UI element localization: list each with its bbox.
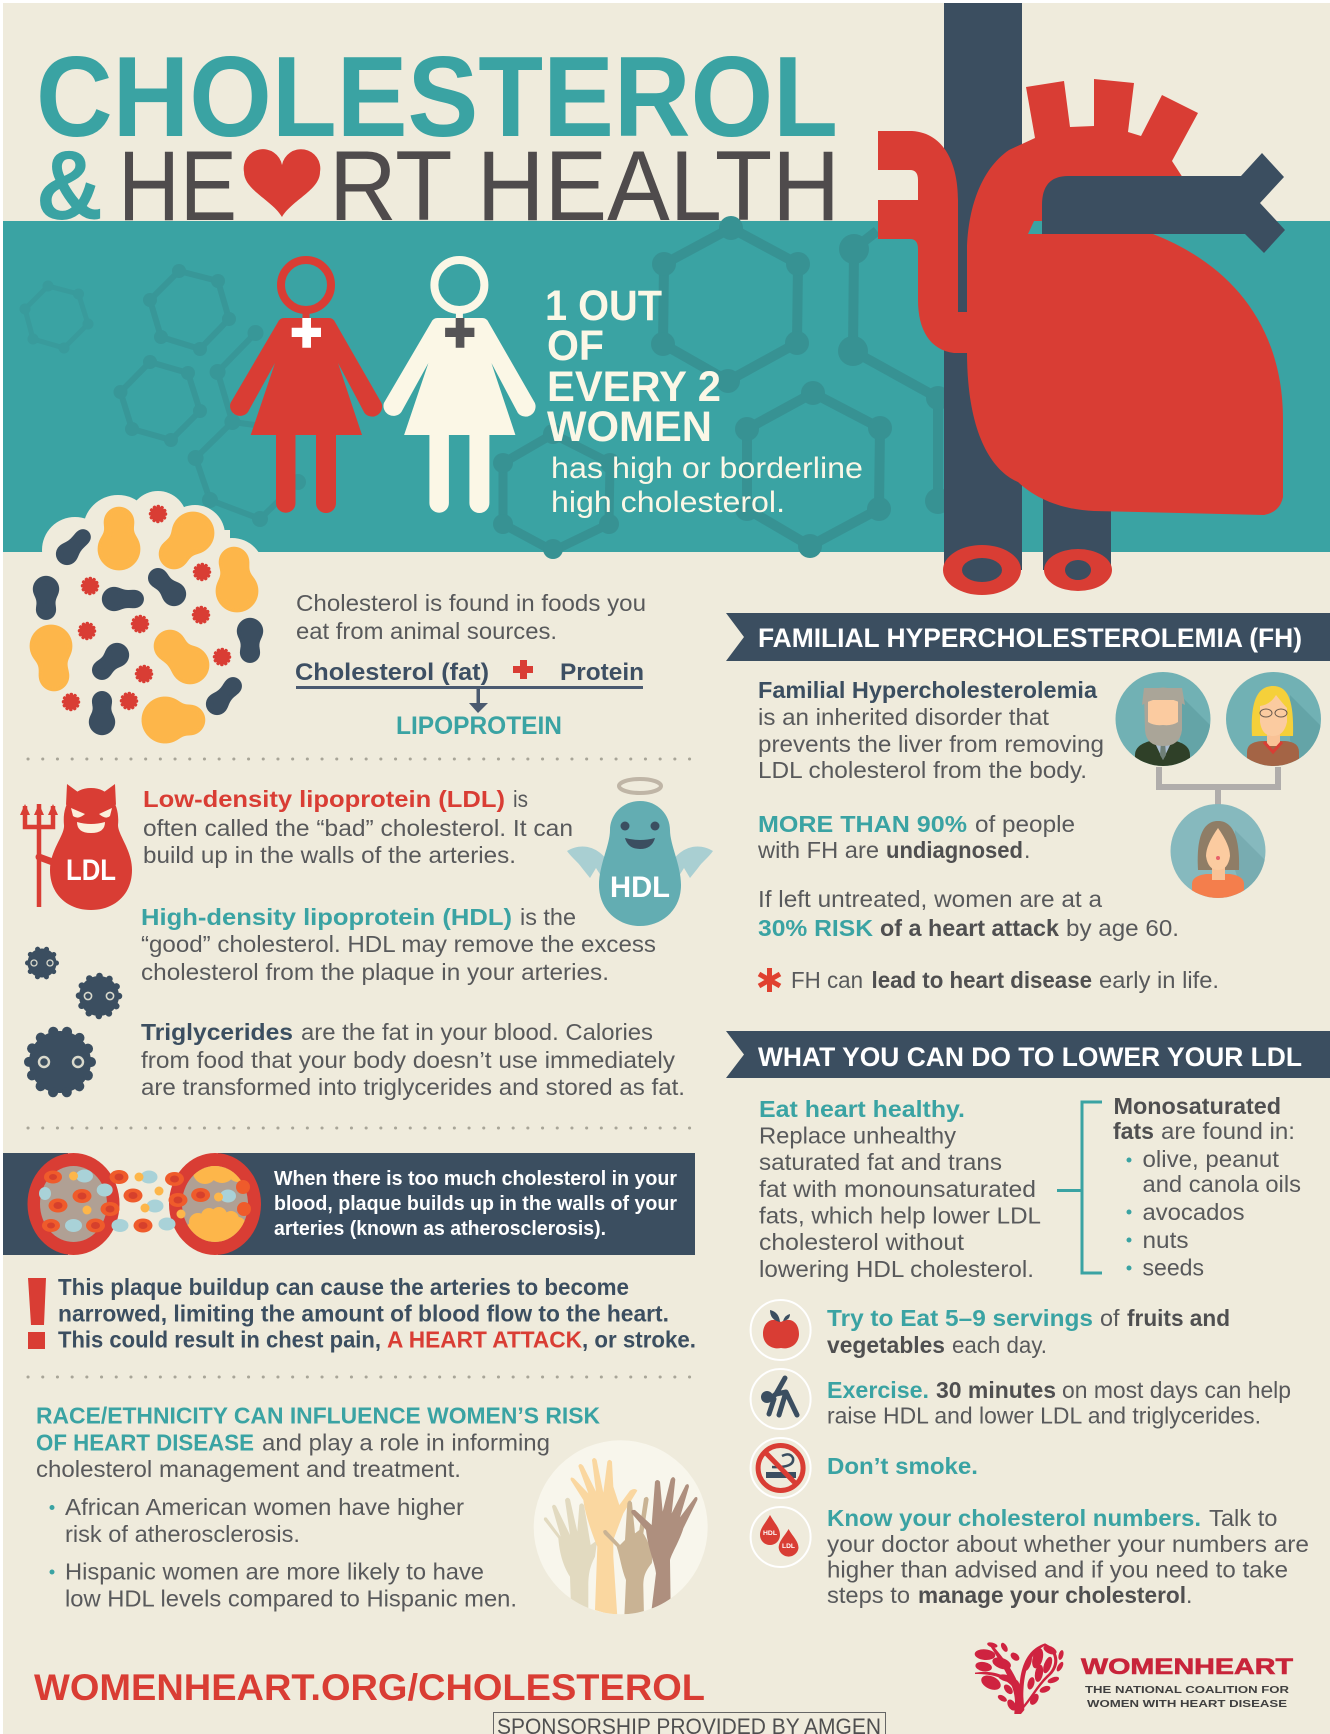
portrait: woman: [1226, 672, 1325, 770]
equation: lipoprotein: LIPOPROTEIN: [396, 712, 562, 740]
callout text: [274, 1168, 677, 1240]
trident: [25, 804, 53, 907]
second vein: [1043, 400, 1111, 570]
text: undiagnosed stat: .: [1024, 837, 1030, 863]
list: race bullets: [50, 1494, 517, 1612]
red particles: [64, 506, 230, 710]
list: monosaturated fats: fats: [1113, 1118, 1154, 1144]
text: risk stat: by age 60.: [1066, 915, 1179, 941]
text: know your numbers: .: [1186, 1582, 1192, 1608]
teal banner band: [3, 216, 1330, 559]
list: monosaturated fats: Monosaturated: [1114, 1093, 1281, 1119]
peach hand: [571, 1458, 637, 1617]
text: risk stat: [758, 886, 1179, 941]
banner: lower LDL heading: [726, 1031, 1330, 1078]
illustration: arteries: [28, 1153, 261, 1255]
title line two start: HE: [118, 130, 237, 241]
arrow down: [469, 688, 488, 713]
gap teal: [1028, 221, 1042, 234]
text: FH description: [758, 677, 1104, 783]
text: plaque warning: narrowed, limiting the amount of blood flow to the heart.: [58, 1300, 669, 1326]
text: exercise: [827, 1377, 1291, 1428]
text: triglycerides: are the fat in your blood. Calories: [301, 1019, 653, 1045]
text: know your numbers: your doctor about whether your numbers are: [827, 1531, 1309, 1557]
list: monosaturated fats: and canola oils: [1142, 1171, 1301, 1197]
text: race and ethnicity: cholesterol management and treatment.: [36, 1456, 461, 1482]
text: don't smoke: Don’t smoke.: [827, 1453, 978, 1479]
artery arrow: [1042, 153, 1285, 253]
stat: 1 out of every 2 women: WOMEN: [547, 403, 712, 451]
icon: blood drops: [751, 1507, 811, 1567]
molecule hexagon pattern: [20, 216, 951, 559]
text: fruits and vegetables: vegetables: [827, 1332, 945, 1358]
stat: 1 out of every 2 women: [545, 282, 863, 519]
text: risk stat: If left untreated, women are at a: [758, 886, 1102, 912]
equation: lipoprotein: Protein: [560, 659, 644, 686]
list: race bullets: Hispanic women are more likely to have: [65, 1558, 484, 1584]
text: exercise: on most days can help: [1062, 1377, 1291, 1403]
text: HDL: cholesterol from the plaque in your arteries.: [141, 959, 609, 985]
text: eat heart healthy: fats, which help lower LDL: [759, 1202, 1041, 1228]
text: FH description: LDL cholesterol from the body.: [758, 757, 1087, 783]
banner: lower LDL heading: WHAT YOU CAN DO TO LOWER YOUR LDL: [758, 1042, 1302, 1072]
text: FH description: Familial Hypercholesterolemia: [758, 677, 1097, 703]
illustration: raised hands: [534, 1440, 708, 1617]
text: FH description: is an inherited disorder that: [758, 704, 1050, 730]
stat: 1 out of every 2 women: high cholesterol.: [551, 486, 785, 519]
wings: [567, 846, 713, 884]
portrait: daughter: [1170, 804, 1270, 900]
icons: triglyceride germs: [28, 948, 119, 1093]
text: eat heart healthy: lowering HDL cholesterol.: [759, 1256, 1034, 1282]
equation: lipoprotein: Cholesterol (fat): [295, 659, 489, 686]
icon: exercise: [751, 1369, 811, 1429]
text: LDL: [143, 786, 573, 868]
list: monosaturated fats: nuts: [1142, 1227, 1188, 1253]
text: HDL: “good” cholesterol. HDL may remove the excess: [141, 931, 656, 957]
text: eat heart healthy: Eat heart healthy.: [759, 1096, 965, 1122]
icon: HDL angel: [567, 779, 713, 926]
icon: plus: [513, 660, 533, 679]
text: HDL: [141, 904, 656, 985]
text: undiagnosed stat: [757, 811, 1075, 863]
text: fruits and vegetables: of: [1100, 1305, 1120, 1331]
bracket: [1057, 1102, 1102, 1273]
icon: LDL devil: LDL: [66, 854, 116, 887]
text: FH description: prevents the liver from removing: [758, 731, 1104, 757]
stat: 1 out of every 2 women: has high or borderline: [551, 452, 863, 485]
text: triglycerides: [141, 1019, 685, 1100]
text: fruits and vegetables: each day.: [952, 1332, 1047, 1358]
text: eat heart healthy: [759, 1096, 1041, 1282]
icon: woman red: [230, 260, 382, 513]
text: undiagnosed stat: undiagnosed: [886, 837, 1023, 863]
text: know your numbers: steps to: [827, 1582, 910, 1608]
callout text: When there is too much cholesterol in your: [274, 1168, 677, 1190]
list: monosaturated fats: avocados: [1142, 1199, 1244, 1225]
text: found in foods: [296, 590, 646, 644]
logo tagline: [1085, 1684, 1290, 1710]
list: monosaturated fats: are found in:: [1161, 1118, 1295, 1144]
logo tagline: THE NATIONAL COALITION FOR: [1085, 1684, 1290, 1696]
logo wordmark: WOMENHEART: [1081, 1654, 1294, 1679]
text: LDL: Low-density lipoprotein (LDL): [143, 786, 505, 812]
icon: asterisk: [759, 968, 780, 992]
title: CHOLESTEROL: [36, 34, 838, 161]
list: monosaturated fats: [1113, 1093, 1301, 1280]
text: eat heart healthy: cholesterol without: [759, 1229, 965, 1255]
vein ring right: [1044, 549, 1112, 591]
text: know your numbers: Know your cholesterol numbers.: [827, 1505, 1201, 1531]
banner: FH heading: [726, 613, 1330, 661]
text: triglycerides: from food that your body doesn’t use immediately: [141, 1047, 676, 1073]
text: LDL: often called the “bad” cholesterol. It can: [143, 815, 573, 841]
stat: 1 out of every 2 women: 1 OUT: [545, 282, 662, 330]
text: know your numbers: manage your cholesterol: [918, 1582, 1186, 1608]
title line two end: RT HEALTH: [329, 130, 840, 241]
text: HDL: High-density lipoprotein (HDL): [141, 904, 512, 930]
text: exercise: 30 minutes: [936, 1377, 1056, 1403]
icon: blood drops: LDL: [782, 1544, 795, 1550]
text: know your numbers: higher than advised and if you need to take: [827, 1556, 1288, 1582]
note: early heart disease: lead to heart disease: [872, 967, 1092, 993]
text: plaque warning: A HEART ATTACK: [387, 1326, 582, 1352]
text: triglycerides: are transformed into triglycerides and stored as fat.: [141, 1074, 685, 1100]
logo heart tree: [974, 1641, 1065, 1714]
heart body: [967, 79, 1283, 515]
text: fruits and vegetables: fruits and: [1127, 1305, 1230, 1331]
text: LDL: build up in the walls of the arteries.: [143, 842, 516, 868]
icon: blood drops: HDL: [763, 1531, 777, 1537]
icon: apple: [751, 1300, 811, 1360]
gap between arteries: [68, 1153, 218, 1255]
list: monosaturated fats: olive, peanut: [1142, 1146, 1280, 1172]
note: early heart disease: early in life.: [1099, 967, 1219, 993]
lipoprotein cluster: [30, 491, 264, 743]
stat: 1 out of every 2 women: EVERY 2: [547, 363, 721, 411]
text: plaque warning: [58, 1274, 696, 1352]
callout text: arteries (known as atherosclerosis).: [274, 1218, 606, 1240]
cluster blob outline: [42, 491, 264, 602]
navy particles: [33, 529, 263, 735]
equation: lipoprotein: [295, 659, 644, 740]
text: triglycerides: Triglycerides: [141, 1019, 293, 1045]
website url: WOMENHEART.ORG/CHOLESTEROL: [34, 1667, 705, 1708]
title: [36, 34, 840, 241]
left vessel: [878, 131, 968, 353]
logo tagline: WOMEN WITH HEART DISEASE: [1087, 1698, 1287, 1710]
icon: heart letter: [244, 149, 320, 217]
text: plaque warning: This could result in chest pain,: [58, 1326, 381, 1352]
list: monosaturated fats: seeds: [1142, 1254, 1204, 1280]
brown hand: [631, 1477, 697, 1612]
halo: [619, 779, 661, 793]
text: race and ethnicity: RACE/ETHNICITY CAN INFLUENCE WOMEN’S RISK: [36, 1402, 600, 1428]
text: eat heart healthy: saturated fat and trans: [759, 1149, 1002, 1175]
callout text: blood, plaque builds up in the walls of your: [274, 1193, 677, 1215]
list: race bullets: African American women have higher: [65, 1494, 464, 1520]
heart illustration: [878, 3, 1285, 595]
text: undiagnosed stat: MORE THAN 90%: [758, 811, 967, 837]
text: LDL: is: [513, 786, 528, 812]
text: HDL: is the: [520, 904, 576, 930]
list: race bullets: low HDL levels compared to Hispanic men.: [65, 1586, 517, 1612]
icon: HDL angel: HDL: [610, 871, 670, 904]
list: race bullets: risk of atherosclerosis.: [65, 1521, 300, 1547]
portrait: man: [1116, 672, 1215, 770]
text: risk stat: of a heart attack: [880, 915, 1059, 941]
banner: FH heading: FAMILIAL HYPERCHOLESTEROLEMIA (FH): [758, 623, 1302, 653]
logo: WomenHeart: [974, 1641, 1294, 1714]
text: eat heart healthy: Replace unhealthy: [759, 1122, 957, 1148]
text: race and ethnicity: OF HEART DISEASE: [36, 1430, 254, 1456]
note: early heart disease: FH can: [791, 967, 863, 993]
ampersand: &: [36, 130, 103, 240]
note: early heart disease: [759, 967, 1219, 993]
vein ring left: [943, 545, 1021, 595]
panel: plaque callout: [3, 1153, 695, 1255]
text: found in foods: eat from animal sources.: [296, 618, 557, 644]
text: fruits and vegetables: Try to Eat 5–9 servings: [827, 1305, 1093, 1331]
text: found in foods: Cholesterol is found in foods you: [296, 590, 646, 616]
icon: no smoking: [751, 1438, 811, 1498]
icon: woman cream: [383, 260, 536, 513]
pale hand: [544, 1498, 597, 1608]
text: fruits and vegetables: [827, 1305, 1230, 1358]
family tree connector: [1159, 767, 1278, 806]
text: undiagnosed stat: with FH are: [757, 837, 879, 863]
icon: LDL devil: [20, 784, 132, 910]
text: race and ethnicity: [36, 1402, 600, 1482]
text: risk stat: 30% RISK: [758, 915, 873, 941]
horns: [66, 784, 116, 805]
vein column: [944, 3, 1022, 570]
text: race and ethnicity: and play a role in informing: [262, 1430, 550, 1456]
stat: 1 out of every 2 women: OF: [547, 322, 604, 370]
text: exercise: Exercise.: [827, 1377, 929, 1403]
text: know your numbers: [827, 1505, 1309, 1608]
tan hand: [603, 1497, 652, 1617]
icon: exclamation: [28, 1278, 46, 1349]
text: exercise: raise HDL and lower LDL and triglycerides.: [827, 1402, 1261, 1428]
text: undiagnosed stat: of people: [975, 811, 1075, 837]
text: plaque warning: This plaque buildup can cause the arteries to become: [58, 1274, 629, 1300]
orange particles: [30, 507, 258, 743]
text: know your numbers: Talk to: [1209, 1505, 1278, 1531]
text: eat heart healthy: fat with monounsaturated: [759, 1176, 1036, 1202]
text: plaque warning: , or stroke.: [582, 1326, 696, 1352]
